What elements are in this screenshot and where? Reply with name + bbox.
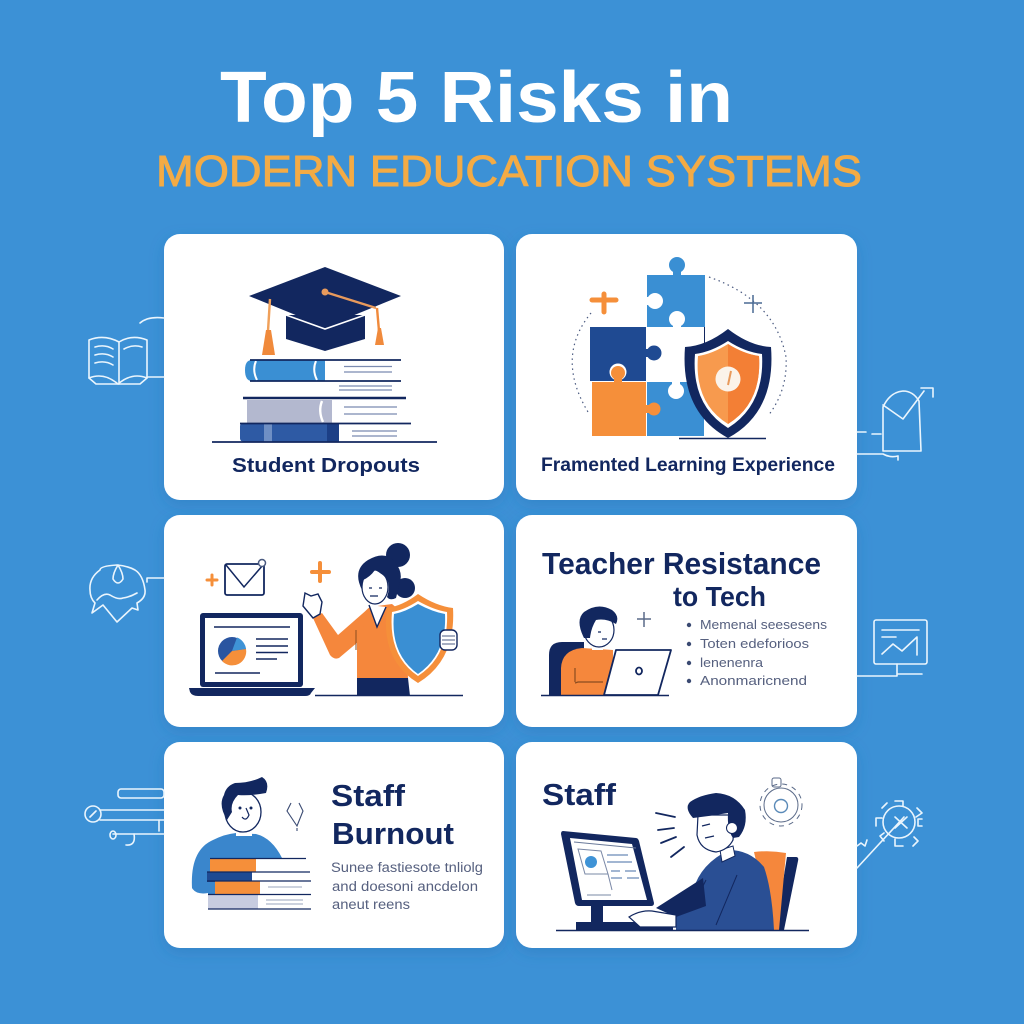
icon: open book outline: [89, 318, 164, 384]
icon: navy plus: [744, 295, 762, 313]
heading: teacher resistance: Teacher Resistance: [542, 546, 821, 581]
panel: student dropouts: [164, 234, 504, 500]
heading: staff: Staff: [542, 777, 617, 812]
bullet 3: lenenenra: [700, 655, 764, 670]
icon: pen nib: [287, 803, 303, 831]
illustration: monitor: [561, 831, 673, 930]
bullet 2: Toten edeforioos: [700, 636, 810, 651]
panel: fragmented learning experience: [516, 234, 857, 500]
heading: staff: Staff: [331, 778, 406, 813]
body text: aneut reens: [332, 897, 410, 912]
illustration: woman holding shield: [303, 543, 415, 696]
ground line: [556, 930, 809, 932]
icon: envelope outline with arrow: [857, 388, 933, 460]
motion lines: [656, 813, 684, 857]
icon: stopwatch: [760, 778, 802, 826]
panel: staff burnout: [164, 742, 504, 948]
ground line: [315, 694, 463, 696]
icon: blue shield: [386, 594, 457, 683]
bullet 1: Memenal seesesens: [700, 617, 828, 632]
icon: small plus: [207, 575, 217, 585]
icon: shell outline: [90, 565, 164, 622]
illustration: person with books: [192, 777, 311, 909]
icon: orange plus: [592, 294, 616, 312]
label: student dropouts: Student Dropouts: [232, 454, 420, 477]
body text: Sunee fastiesote tnliolg: [331, 860, 483, 875]
body text: [331, 860, 483, 912]
panel: teacher resistance to tech: [516, 515, 857, 727]
bullet 4: Anonmaricnend: [700, 673, 807, 688]
body text: and doesoni ancdelon: [332, 879, 478, 894]
subtitle: MODERN EDUCATION SYSTEMS: [156, 147, 862, 196]
heading: to tech: to Tech: [673, 581, 766, 612]
illustration: seated person: [629, 793, 798, 930]
icon: orange shield: [679, 329, 771, 438]
illustration: person at laptop: [541, 606, 671, 696]
panel: staff at computer: [516, 742, 857, 948]
icon: chart monitor outline: [857, 620, 927, 676]
icon: laptop with chart: [189, 613, 315, 696]
bullet list: [687, 617, 828, 688]
icon: envelope: [225, 560, 266, 595]
title: Top 5 Risks in: [220, 58, 733, 138]
icon: graduation cap: [249, 267, 401, 355]
label: framented learning experience: Framented Learning Experience: [541, 455, 835, 476]
icon: puzzle pieces: [590, 257, 705, 436]
icon: circuit lines outline: [85, 789, 164, 845]
heading: burnout: Burnout: [332, 816, 454, 851]
icon: large plus: [312, 563, 329, 581]
icon: gear outline with arrow: [857, 801, 922, 868]
dotted circle: [572, 277, 786, 416]
panel: woman with shield: [164, 515, 504, 727]
icon: stack of books: [212, 360, 437, 442]
icon: plus: [637, 612, 651, 627]
